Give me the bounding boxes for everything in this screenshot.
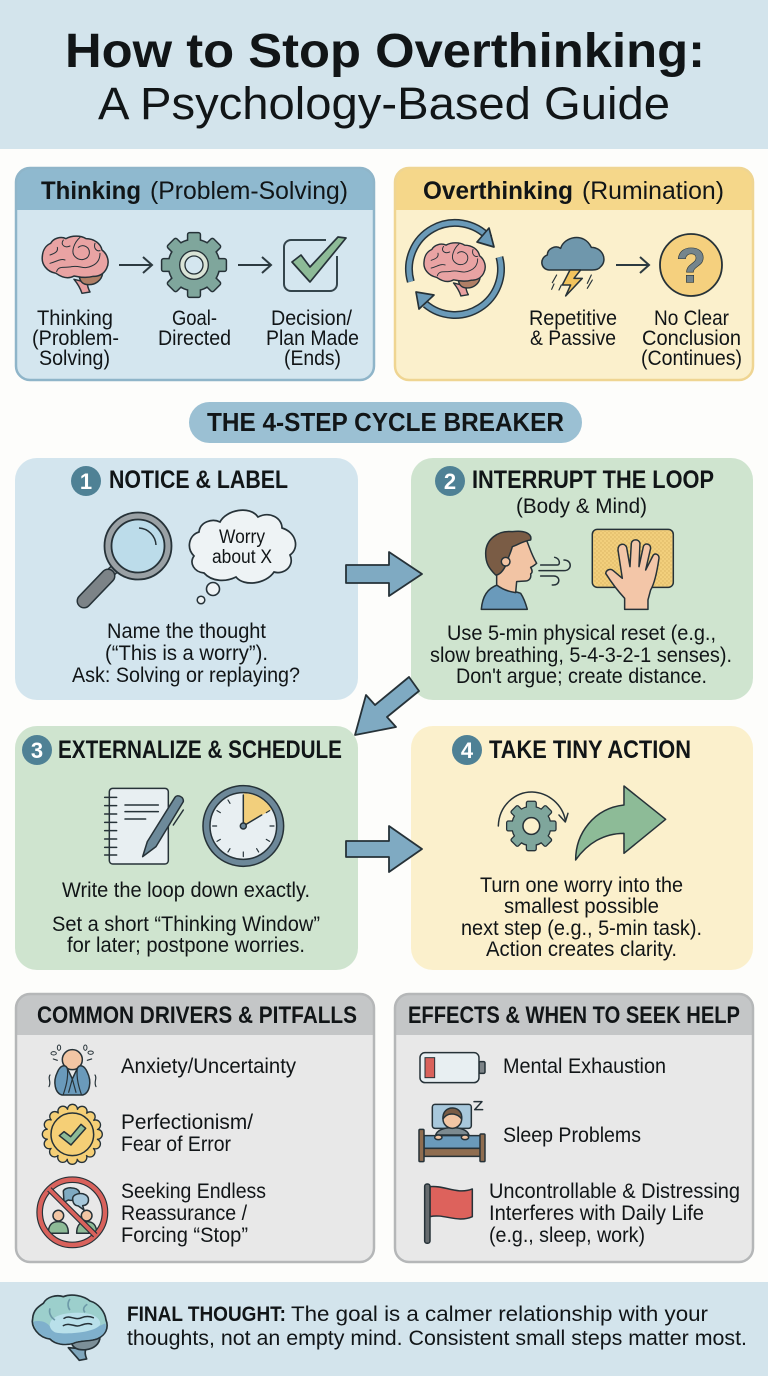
arrow: step 2 to step 3 <box>355 677 419 735</box>
panel: effects and when to seek help <box>395 994 753 1262</box>
panel heading: thinking: Thinking <box>41 177 141 205</box>
icon: brain in loop <box>409 223 501 315</box>
step text 3 <box>52 879 320 957</box>
label: thinking: (Problem- <box>32 327 119 350</box>
step text 1 <box>72 620 300 687</box>
icon: perfection badge <box>47 1109 97 1159</box>
icon: no reassurance <box>40 1180 105 1245</box>
item: perfectionism <box>121 1111 253 1156</box>
panel heading: overthinking: (Rumination) <box>582 177 724 205</box>
icon: magnifying glass <box>84 512 172 601</box>
label: decision: Plan Made <box>266 327 359 350</box>
icon: low battery <box>420 1053 485 1083</box>
panel: thinking <box>16 168 374 380</box>
icon: brain <box>42 236 108 293</box>
item: reassurance: Forcing “Stop” <box>121 1224 248 1247</box>
label: decision: Decision/ <box>271 307 352 330</box>
final thought text: The goal is a calmer relationship with your <box>291 1303 708 1326</box>
icon: storm cloud <box>542 237 604 296</box>
footer: final thought <box>0 1282 768 1376</box>
label: thinking <box>32 307 119 370</box>
item: mental exhaustion: Mental Exhaustion <box>503 1055 666 1078</box>
label: decision: (Ends) <box>284 347 341 370</box>
label: repetitive and passive: & Passive <box>530 327 616 350</box>
item: perfectionism: Fear of Error <box>121 1133 231 1156</box>
panel heading: overthinking <box>423 177 724 205</box>
step text 2 <box>430 622 732 688</box>
thought text <box>212 527 272 568</box>
panel: common drivers and pitfalls <box>16 994 374 1262</box>
panel: step 4 take tiny action <box>411 726 753 970</box>
item: reassurance: Reassurance / <box>121 1202 247 1225</box>
step subheading 2: (Body & Mind) <box>516 495 647 518</box>
title line 2: A Psychology-Based Guide <box>98 78 670 129</box>
panel: overthinking <box>395 168 753 380</box>
item: reassurance: Seeking Endless <box>121 1180 266 1203</box>
label: thinking: Solving) <box>39 347 110 370</box>
label: thinking: Thinking <box>37 307 113 330</box>
step text 2: Use 5-min physical reset (e.g., <box>447 622 716 645</box>
label: no clear conclusion: (Continues) <box>641 347 742 370</box>
final thought text <box>127 1303 747 1350</box>
panel heading: overthinking: Overthinking <box>423 177 573 205</box>
arrow: brain to gear <box>119 257 152 273</box>
icon: gear <box>162 233 226 297</box>
icon: clock <box>203 786 284 866</box>
step heading 3: EXTERNALIZE & SCHEDULE <box>58 736 342 764</box>
label: no clear conclusion <box>641 307 742 370</box>
title line 1: How to Stop Overthinking: <box>65 25 705 78</box>
final thought text: FINAL THOUGHT: <box>127 1303 286 1326</box>
label: goal-directed: Directed <box>158 327 231 350</box>
item: when to seek help: Interferes with Daily Life <box>489 1202 704 1225</box>
item: reassurance <box>121 1180 266 1247</box>
step number 1: 1 <box>80 469 92 494</box>
step number 2: 2 <box>444 469 456 494</box>
icon: person in bed <box>419 1102 485 1162</box>
step text 4: next step (e.g., 5-min task). <box>461 917 702 940</box>
arrow: gear to decision <box>238 257 271 273</box>
step text 1: (“This is a worry”). <box>105 642 268 665</box>
page header <box>0 0 768 149</box>
step number 4: 4 <box>461 738 474 763</box>
icon: question mark: ? <box>676 240 706 293</box>
final thought text: thoughts, not an empty mind. Consistent small steps matter most. <box>127 1327 747 1350</box>
thought text: Worry <box>219 527 265 548</box>
panel heading: drivers: COMMON DRIVERS & PITFALLS <box>37 1002 357 1029</box>
panel: step 2 interrupt the loop <box>411 458 753 700</box>
icon: hand on textured surface <box>592 529 673 609</box>
item: anxiety: Anxiety/Uncertainty <box>121 1055 296 1078</box>
step number 3: 3 <box>31 738 43 763</box>
label: no clear conclusion: Conclusion <box>642 327 741 350</box>
item: when to seek help: Uncontrollable & Distressing <box>489 1180 740 1203</box>
icon: notebook and pen <box>105 788 183 864</box>
step text 4 <box>461 874 702 961</box>
section heading pill: THE 4-STEP CYCLE BREAKER <box>207 407 564 437</box>
icon: forward arrow <box>576 786 666 860</box>
panel: step 1 notice and label <box>15 458 358 700</box>
panel heading: thinking: (Problem-Solving) <box>150 177 348 205</box>
icon: calm brain <box>32 1295 107 1360</box>
icon: red flag <box>425 1184 472 1243</box>
item: when to seek help: (e.g., sleep, work) <box>489 1224 645 1247</box>
step heading 1: NOTICE & LABEL <box>109 466 288 494</box>
step text 4: Turn one worry into the <box>480 874 683 897</box>
label: repetitive and passive <box>529 307 617 350</box>
icon: person breathing <box>481 531 570 609</box>
step text 2: slow breathing, 5-4-3-2-1 senses). <box>430 644 732 667</box>
icon: question mark <box>660 234 722 296</box>
icon: thought cloud <box>189 510 296 604</box>
step text 2: Don't argue; create distance. <box>456 665 707 688</box>
arrow: step 1 to step 2 <box>346 552 422 596</box>
icon: rotating gear <box>498 792 568 850</box>
thought text: about X <box>212 547 272 568</box>
step heading 2: INTERRUPT THE LOOP <box>472 466 714 494</box>
icon: check box <box>284 237 346 291</box>
step number 1 <box>71 466 101 496</box>
step heading 4: TAKE TINY ACTION <box>489 736 691 764</box>
label: decision <box>266 307 359 370</box>
label: repetitive and passive: Repetitive <box>529 307 617 330</box>
panel: step 3 externalize and schedule <box>15 726 358 970</box>
label: no clear conclusion: No Clear <box>654 307 729 330</box>
step text 4: smallest possible <box>504 895 659 918</box>
item: perfectionism: Perfectionism/ <box>121 1111 253 1134</box>
step text 4: Action creates clarity. <box>486 938 677 961</box>
step text 1: Ask: Solving or replaying? <box>72 664 300 687</box>
step number 3 <box>22 735 52 765</box>
step text 1: Name the thought <box>107 620 266 643</box>
step text 3: for later; postpone worries. <box>67 934 305 957</box>
item: when to seek help <box>489 1180 740 1247</box>
step number 2 <box>435 466 465 496</box>
step text 3: Write the loop down exactly. <box>62 879 310 902</box>
step text 3: Set a short “Thinking Window” <box>52 913 320 936</box>
arrow: step 3 to step 4 <box>346 826 422 872</box>
label: goal-directed <box>158 307 231 350</box>
section heading pill <box>189 402 582 443</box>
arrow: storm to question <box>616 257 649 273</box>
label: goal-directed: Goal- <box>172 307 217 330</box>
item: sleep problems: Sleep Problems <box>503 1124 641 1147</box>
panel heading: thinking <box>41 177 348 205</box>
icon: anxious person <box>49 1045 96 1095</box>
step number 4 <box>452 735 482 765</box>
